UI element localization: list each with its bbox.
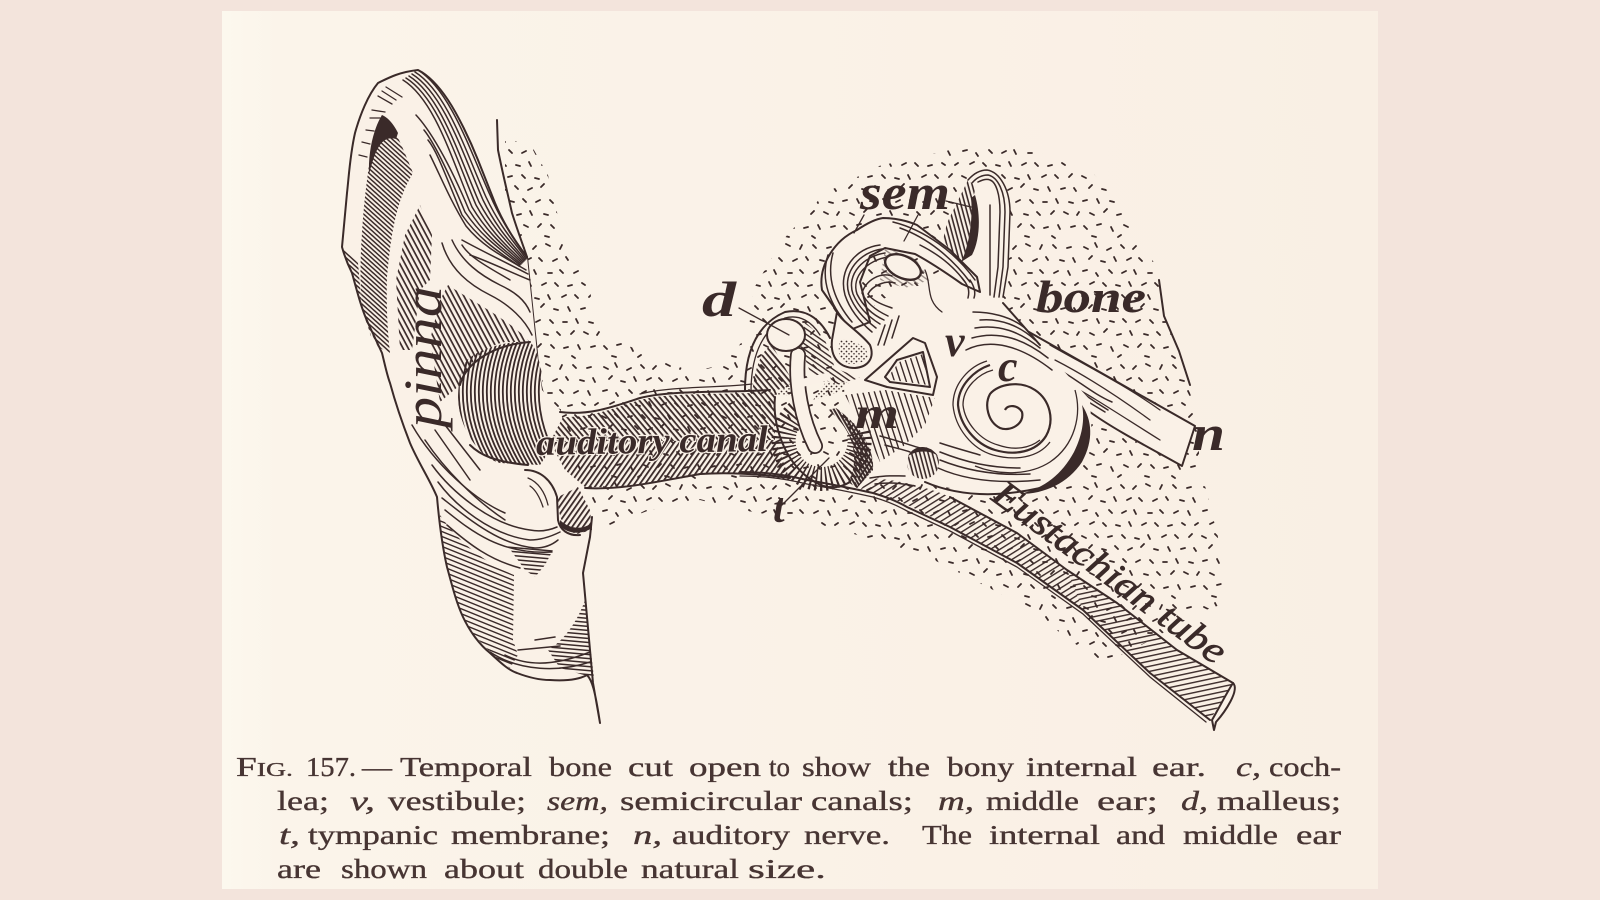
tube hatching left part <box>860 478 1083 610</box>
caption line 4 <box>277 854 826 884</box>
caption line 3: membrane; <box>451 820 610 850</box>
label c: c <box>998 342 1018 391</box>
auditory nerve <box>1029 332 1195 466</box>
vestibule lower lines <box>870 436 1040 486</box>
fold lines <box>442 240 532 335</box>
caption line 2: ear; <box>1097 786 1158 816</box>
ear fill <box>342 70 600 723</box>
dotted shading right <box>813 382 850 400</box>
malleus head <box>767 319 805 351</box>
window inner <box>885 352 930 387</box>
canal left hatching <box>943 180 976 262</box>
caption line 2: semicircular <box>620 786 802 816</box>
tube lower double edge <box>740 476 1206 722</box>
spiral <box>958 365 1050 453</box>
caption line 1: to <box>769 752 790 782</box>
antihelix hatching <box>396 205 432 350</box>
label n: n <box>1192 405 1225 461</box>
caption line 1: the <box>888 752 930 782</box>
helix back lines <box>403 70 530 280</box>
caption line 2: vestibule; <box>388 786 526 816</box>
caption line 3 <box>279 820 1341 850</box>
label sem: sem <box>859 164 950 220</box>
lower concha lines <box>412 425 560 568</box>
malleus arm <box>802 376 830 383</box>
caption line 1: Temporal <box>400 752 532 782</box>
vestibule heavy lower line <box>925 482 1040 494</box>
back of lobe hatching <box>548 600 594 678</box>
caption line 3: auditory <box>672 820 791 850</box>
saccule <box>832 312 872 368</box>
vestibule contour <box>925 270 942 312</box>
caption line 2: canals; <box>811 786 913 816</box>
label t: t <box>773 486 786 532</box>
canal upper hatching <box>550 392 775 442</box>
caption line 3: ear <box>1296 820 1341 850</box>
label bone: bone <box>1036 271 1146 322</box>
caption line 1: coch- <box>1269 752 1341 782</box>
leader line t <box>782 458 829 505</box>
canal upper outer edge <box>640 384 752 394</box>
tragus dark notch <box>560 520 592 533</box>
saccule outline <box>832 312 872 368</box>
ring outer edge <box>775 397 850 487</box>
caption line 2: lea; <box>277 786 329 816</box>
attic left hatching <box>752 345 795 395</box>
caption line 3: and <box>1116 820 1166 850</box>
caption line 4: are <box>277 854 321 884</box>
semicircular canals <box>821 170 1010 345</box>
cochlea <box>953 361 1090 494</box>
canal lower hatching <box>550 440 790 487</box>
bone boundary of vestibule <box>1003 303 1040 345</box>
caption line 3: The <box>922 820 972 850</box>
stapes hatched ball <box>907 447 939 479</box>
auditory canal <box>550 384 790 488</box>
caption line 1: bone <box>549 752 612 782</box>
caption line 4: double <box>538 854 628 884</box>
vestibule upper lines <box>966 312 1052 370</box>
helix inner shading <box>360 115 413 353</box>
concha bowl <box>458 342 548 465</box>
label auditory canal: auditory canal <box>536 419 769 464</box>
caption line 3: nerve. <box>804 820 890 850</box>
oval window <box>865 338 937 395</box>
canal outer ribs <box>968 170 1010 297</box>
nerve root lines <box>1060 370 1112 412</box>
concha rim <box>460 342 530 465</box>
dark crescent <box>828 408 873 488</box>
label pinna: pinna <box>393 286 453 433</box>
malleus <box>745 311 860 446</box>
tragus shadow <box>558 487 592 534</box>
antihelix folds <box>430 285 530 402</box>
attic right hatching <box>800 322 860 385</box>
posterior canal pale fill <box>943 170 1010 300</box>
upper ribs <box>893 222 975 282</box>
canal upper edge <box>560 390 770 413</box>
canal arcs <box>825 245 895 332</box>
tube lower edge <box>740 472 1210 720</box>
caption line 4: size. <box>748 854 826 884</box>
caption line 1: open <box>689 752 762 782</box>
caption line 2: v, <box>350 786 375 816</box>
caption line 1: bony <box>947 752 1015 782</box>
label v: v <box>945 317 965 366</box>
canal dark crescent <box>961 195 979 262</box>
attic arch inner <box>751 317 820 392</box>
crescent cross hatch <box>840 412 873 488</box>
skull edge line <box>497 120 560 410</box>
label m: m <box>855 389 899 438</box>
pinna <box>342 70 600 723</box>
caption line 3: n, <box>633 820 662 850</box>
caption line 2 <box>277 786 1341 816</box>
infographic page <box>222 11 1378 889</box>
label Eustachian tube: Eustachian tube <box>984 472 1235 673</box>
lobe hatching <box>440 515 518 668</box>
ball shadow <box>908 447 938 456</box>
dotted shading left <box>773 380 795 396</box>
caption line 1: F IG. <box>236 752 293 782</box>
tube hatching right part <box>1067 570 1233 720</box>
leader line sem two <box>904 215 918 241</box>
tympanic ring <box>775 397 873 488</box>
helix deep shadow <box>369 115 398 175</box>
window frame <box>865 338 937 395</box>
caption line 4: natural <box>641 854 739 884</box>
helix top ticks <box>359 87 402 157</box>
caption line 1: — <box>361 752 393 782</box>
label d: d <box>702 271 737 327</box>
bone right edge line <box>1159 280 1190 385</box>
caption line 2: sem, <box>547 786 608 816</box>
canal opening <box>881 249 925 285</box>
tragus arcs <box>528 478 548 507</box>
canal lower edge <box>585 473 790 488</box>
horizontal canal <box>821 218 980 330</box>
window hatching <box>888 354 928 385</box>
outer crescent <box>1020 405 1090 494</box>
ear outline <box>342 70 600 723</box>
canal opening surround <box>880 248 930 288</box>
caption line 1 <box>236 752 1341 782</box>
caption <box>236 752 1341 884</box>
bone stipple: behind ear and above canal <box>505 140 1223 662</box>
caption line 3: middle <box>1183 820 1278 850</box>
spiral outer turns <box>953 361 1078 473</box>
caption line 4: about <box>444 854 525 884</box>
rim lower hatching <box>342 247 372 340</box>
lobe rim lines <box>490 637 590 669</box>
nerve band <box>1029 332 1195 466</box>
caption line 3: t, <box>279 820 300 850</box>
caption line 1: internal <box>1026 752 1137 782</box>
caption line 2: d, <box>1181 786 1208 816</box>
caption line 2: malleus; <box>1217 786 1341 816</box>
book page <box>222 11 1378 889</box>
illustration: temporal bone and ear <box>342 70 1235 730</box>
tube opening <box>1212 683 1235 730</box>
eustachian tube <box>740 472 1235 730</box>
caption line 1: show <box>802 752 872 782</box>
root ticks <box>962 278 975 298</box>
shadow under fold <box>507 545 553 577</box>
caption line 1: c, <box>1236 752 1261 782</box>
caption line 1: cut <box>628 752 674 782</box>
tragus contour <box>525 470 580 535</box>
caption line 2: m, <box>938 786 974 816</box>
tube upper edge <box>950 497 1233 683</box>
caption line 1: 157. <box>306 752 356 782</box>
radial fan <box>784 412 860 479</box>
nerve fibres <box>1050 345 1160 440</box>
vestibule hatch ticks <box>878 316 899 345</box>
attic arch <box>745 311 830 390</box>
leader line sem one <box>946 201 971 207</box>
caption line 3: tympanic <box>308 820 438 850</box>
vestibule body <box>840 270 1092 494</box>
leader line d <box>739 308 789 335</box>
caption line 3: internal <box>989 820 1100 850</box>
leader line sem three <box>854 215 864 233</box>
caption line 1: ear. <box>1152 752 1206 782</box>
middle ear hatching <box>845 390 935 462</box>
saccule stipple <box>839 340 868 364</box>
caption line 4: shown <box>341 854 428 884</box>
malleus handle <box>797 355 815 446</box>
caption line 2: middle <box>986 786 1079 816</box>
